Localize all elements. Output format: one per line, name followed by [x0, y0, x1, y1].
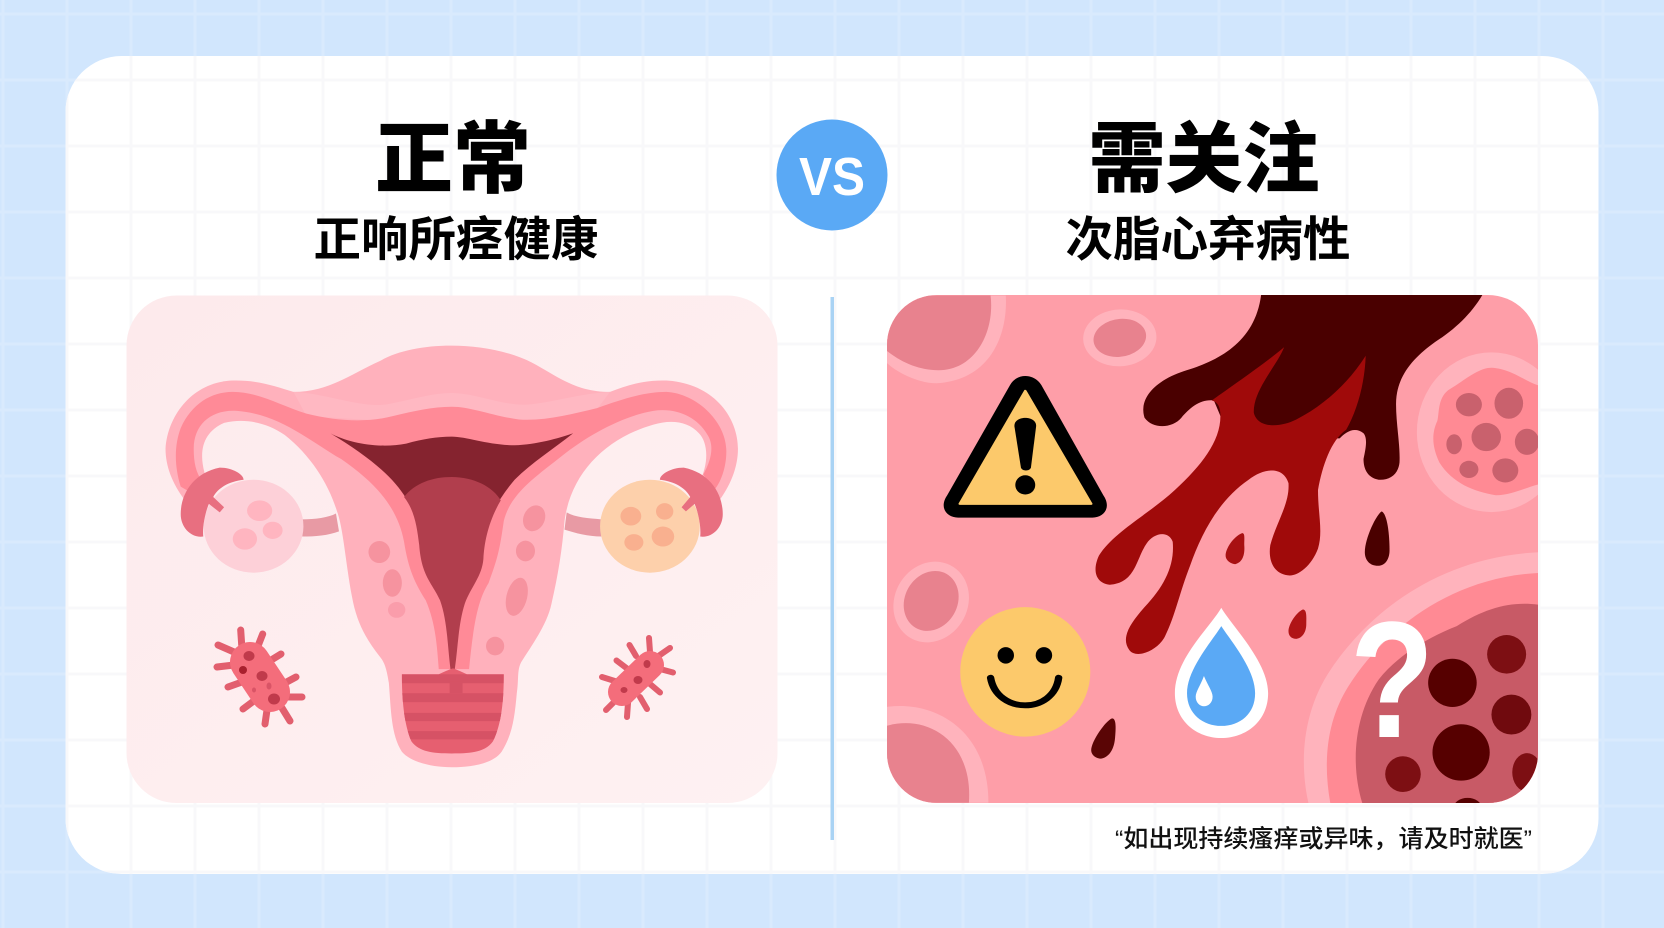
question mark icon: ?: [1350, 588, 1434, 773]
smiley icon: [960, 607, 1090, 737]
uterine wall and tubes: [176, 392, 726, 669]
top-right cell: [1417, 352, 1538, 512]
VS badge: [776, 120, 888, 230]
title: 正常: 正常: [375, 97, 531, 209]
top cell: [1083, 310, 1156, 366]
uterus illustration: [166, 346, 738, 767]
uterus outer body: [166, 346, 738, 767]
pale fundus band: [293, 392, 610, 425]
ligaments: [302, 512, 601, 537]
right bacterium: [602, 638, 673, 717]
top-left cell: [887, 295, 1006, 383]
left fimbria: [181, 468, 244, 537]
subtitle: normal: 正响所痉健康: [314, 201, 598, 270]
symptom scene: [886, 290, 1566, 817]
right ovary: [600, 480, 700, 573]
water drop icon: [1175, 608, 1268, 738]
VS badge: VS: [799, 147, 865, 207]
dark blood splash: [1143, 290, 1485, 480]
warning triangle icon: [944, 376, 1107, 518]
vaginal canal: [398, 668, 510, 753]
left ovary: [204, 480, 303, 573]
cavity: [330, 433, 573, 500]
subtitle: needs attention: 次脂心弃病性: [1066, 201, 1350, 270]
panel: normal anatomy: [126, 290, 1566, 853]
left mid cell: [894, 562, 969, 642]
blood drops: [1091, 511, 1390, 759]
wall spots: [368, 504, 548, 655]
panel: needs attention: [886, 290, 1566, 817]
right fimbria: [660, 468, 723, 537]
center divider line: [830, 297, 834, 840]
left bacterium: [217, 630, 302, 724]
advice note: “如出现持续瘙痒或异味，请及时就医”: [1115, 825, 1532, 853]
inner lining: [404, 477, 501, 669]
red blood splash: [1096, 347, 1366, 654]
bottom-right cell: [1304, 552, 1543, 817]
bottom-left cell: [887, 706, 988, 803]
title: 需关注: 需关注: [1088, 98, 1320, 209]
